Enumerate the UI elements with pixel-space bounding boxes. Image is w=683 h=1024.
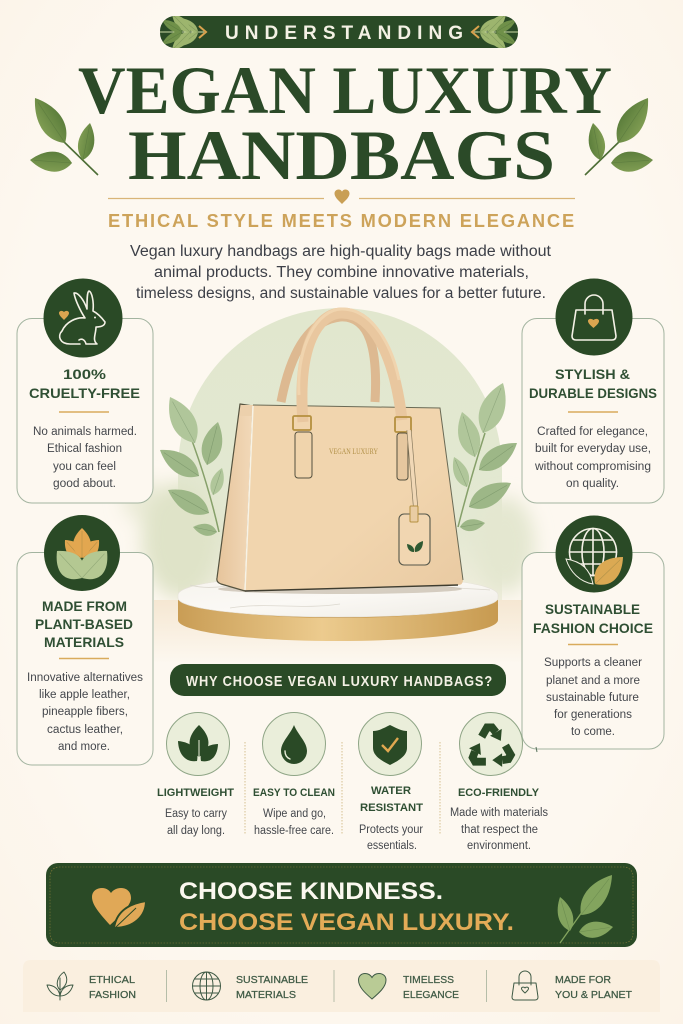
panel: sustainable fashion [522,516,664,752]
intro paragraph: animal products. They combine innovative materials, [154,264,529,281]
benefit: lightweight: all day long. [167,825,225,837]
heading: PLANT-BASED [35,616,133,632]
benefit: lightweight: Easy to carry [165,808,227,820]
call to action banner: CHOOSE VEGAN LUXURY. [179,909,514,936]
podium [178,574,498,641]
body text: Crafted for elegance, [537,426,648,438]
handbag [217,309,463,591]
intro paragraph [130,243,552,302]
icon: sprig [553,869,620,943]
right strap tab [395,417,411,480]
body text: good about. [53,478,116,490]
title [78,52,612,195]
benefit: lightweight [157,712,234,837]
left strap tab [293,416,312,478]
icon: recycle [460,712,522,776]
body text: and more. [58,741,110,753]
benefit: eco-friendly: Made with materials [450,807,548,819]
footer item: sustainable materials: SUSTAINABLE [236,974,308,986]
body text: on quality. [566,478,619,490]
back handle [281,317,376,402]
footer item: made for you and planet: YOU & PLANET [555,989,633,1001]
body text: Supports a cleaner [544,657,642,669]
benefit: easy to clean: hassle-free care. [254,825,334,837]
icon: pill left foliage [160,10,206,54]
call to action banner [46,863,637,947]
subtitle: ETHICAL STYLE MEETS MODERN ELEGANCE [108,211,576,231]
blurred foliage left [122,478,218,598]
heading: STYLISH & [555,366,630,382]
footer item: timeless elegance [358,974,459,1001]
footer item: ethical fashion: ETHICAL [89,974,135,986]
divider with heart [108,190,575,204]
benefit: easy to clean: Wipe and go, [263,808,326,820]
panel: cruelty-free [17,278,153,503]
footer item: timeless elegance: TIMELESS [403,974,454,986]
right sprig [448,379,523,533]
benefit: water resistant: RESISTANT [360,802,423,814]
heading [533,601,653,636]
benefits heading pill [170,664,506,696]
icon: pill right foliage [472,10,518,54]
body text: like apple leather, [39,689,130,701]
title: VEGAN LUXURY [78,52,612,128]
hero: bag on podium [122,308,535,664]
benefits heading pill: WHY CHOOSE VEGAN LUXURY HANDBAGS? [186,673,493,690]
left sprig [155,391,228,538]
icon: leaf outline [47,972,73,1000]
icon: water drop [262,712,326,776]
footer item: timeless elegance: ELEGANCE [403,989,459,1001]
body text: pineapple fibers, [42,706,128,718]
blurred foliage right [475,497,535,593]
icon: handbag [556,278,632,356]
panel: stylish and durable [522,278,664,503]
heading [529,366,657,401]
body text [544,657,642,738]
hang tag [399,430,430,565]
bag front panel [245,405,463,591]
brand text: VEGAN LUXURY [329,447,378,456]
heading: SUSTAINABLE [545,601,640,617]
intro paragraph: Vegan luxury handbags are high-quality bags made without [130,243,552,260]
benefit: water resistant: Protects your [359,824,423,836]
benefit: water resistant [358,712,423,852]
icon: shield [358,712,422,776]
tag leaf [405,539,425,554]
benefit: eco-friendly: that respect the [461,824,538,836]
icon: right title sprig [585,92,657,175]
benefit: easy to clean: EASY TO CLEAN [253,787,335,799]
icon: globe and leaf [556,516,632,592]
body text: cactus leather, [47,724,123,736]
icon: bag outline [512,971,538,1000]
body text [534,426,651,490]
body text: for generations [554,709,632,721]
icon: heart and leaf [92,888,146,928]
heading [29,366,140,401]
footer item: ethical fashion: FASHION [89,989,136,1001]
footer item: sustainable materials [192,972,308,1001]
bag side panel [217,404,253,591]
body text [27,672,143,753]
footer item: made for you and planet: MADE FOR [555,974,611,986]
footer strip [23,960,660,1012]
background arch [178,308,502,600]
icon: leaves [166,712,230,776]
heading: 100% [63,366,107,382]
icon: plant leaves [44,515,120,591]
body text: you can feel [53,461,116,473]
heading [35,598,133,650]
footer item: ethical fashion [47,972,136,1001]
heading: MADE FROM [42,598,127,614]
cta text: CHOOSE KINDNESS. [179,878,443,905]
benefit: water resistant: essentials. [367,840,417,852]
body text [33,426,137,490]
body text: No animals harmed. [33,426,137,438]
benefit separators [245,742,440,835]
benefit: easy to clean [253,712,335,837]
heading: MATERIALS [44,634,124,650]
shadow under bag [218,584,462,594]
benefit: lightweight: LIGHTWEIGHT [157,787,234,799]
intro paragraph: timeless designs, and sustainable values for a better future. [136,285,546,302]
body text: built for everyday use, [535,443,651,455]
body text: Innovative alternatives [27,672,143,684]
front handle [302,313,402,422]
icon: rabbit [44,278,122,358]
benefit: eco-friendly [450,712,548,852]
top pill: understanding [160,10,518,54]
icon: globe outline [192,972,220,1000]
footer item: sustainable materials: MATERIALS [236,989,296,1001]
body text: to come. [571,726,615,738]
body text: Ethical fashion [47,443,122,455]
body text: without compromising [534,461,651,473]
heading: DURABLE DESIGNS [529,385,657,401]
icon: left title sprig [26,92,98,175]
footer item: made for you and planet [512,971,633,1001]
body text: planet and a more [546,675,640,687]
benefit: eco-friendly: ECO-FRIENDLY [458,787,540,799]
heading: CRUELTY-FREE [29,385,140,401]
icon: heart [358,974,386,999]
panel: plant-based materials [17,515,153,765]
title: HANDBAGS [128,117,555,195]
heading: FASHION CHOICE [533,620,653,636]
body text: sustainable future [546,692,639,704]
pill text: UNDERSTANDING [225,23,463,44]
benefit: eco-friendly: environment. [467,840,531,852]
benefit: water resistant: WATER [371,785,411,797]
floor [154,600,523,664]
